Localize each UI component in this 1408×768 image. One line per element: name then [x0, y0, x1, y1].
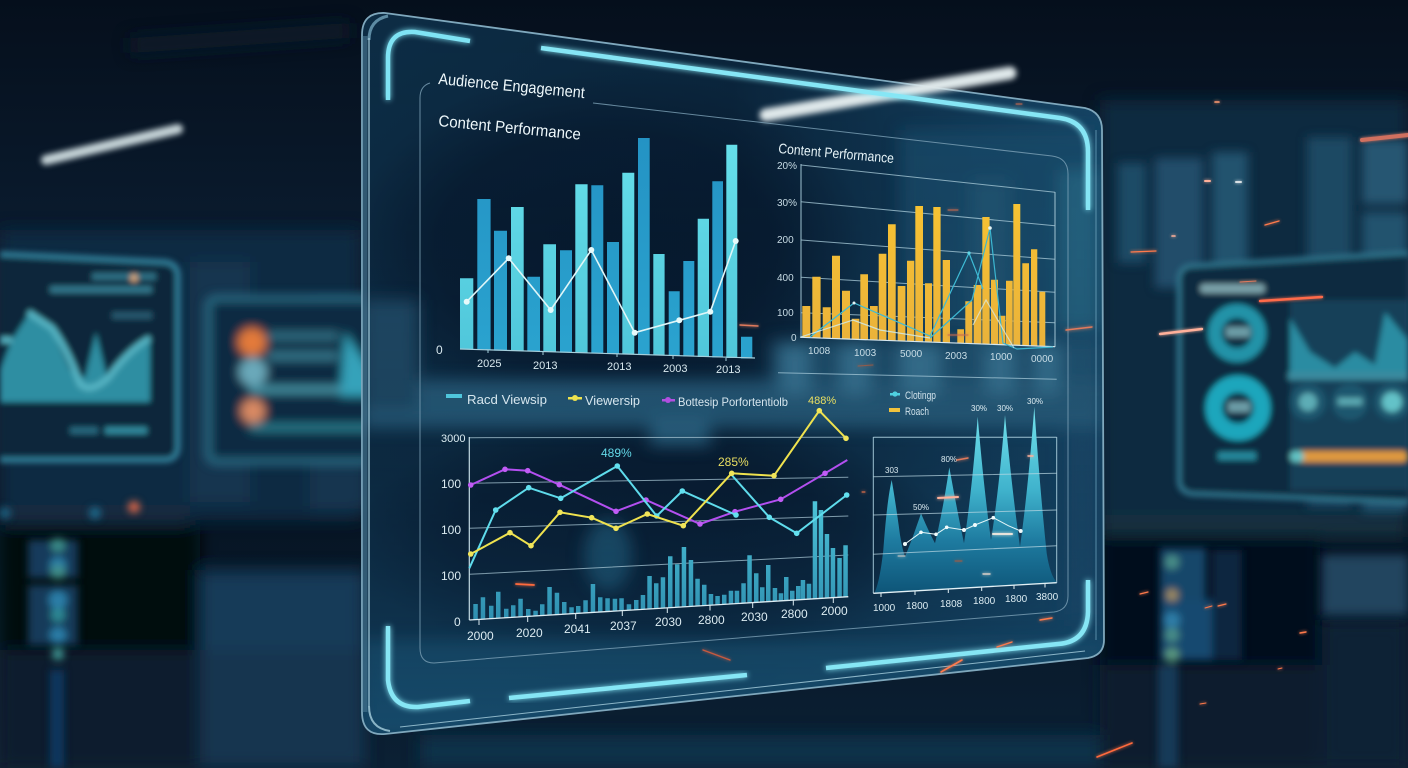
axis labels: 2041	[564, 622, 591, 636]
axis labels: 2030	[655, 615, 682, 629]
heading: Audience Engagement: Audience Engagement	[438, 71, 586, 102]
axis labels: 2037	[610, 619, 637, 633]
axis labels: 20%	[777, 161, 797, 172]
legend: main series: Bottesip Porfortentiolb	[678, 395, 788, 409]
neon frame bracket: bottom left	[388, 626, 470, 707]
neon frame bar: bottom middle	[509, 675, 747, 698]
heading: Content Performance right: Content Performance	[778, 140, 895, 166]
cyan line	[469, 463, 850, 568]
sparks	[516, 102, 1408, 757]
axis labels: 1000	[873, 603, 896, 614]
axis labels	[777, 161, 1054, 365]
glass background reflections	[362, 130, 1102, 735]
axis labels: 2020	[516, 626, 543, 640]
axis labels: 1808	[940, 599, 963, 610]
legend: main series: Racd Viewsip	[467, 392, 547, 407]
neon frame bracket: top left	[388, 32, 470, 100]
ceiling light left	[46, 129, 178, 160]
axis labels: 100	[777, 308, 794, 319]
axis labels: 3800	[1036, 592, 1059, 603]
axis labels: 2013	[533, 360, 557, 372]
data callouts: 285%	[718, 455, 749, 469]
yellow line	[468, 408, 849, 557]
legend: secondary series: Clotingp	[905, 390, 936, 402]
data callouts	[601, 395, 836, 469]
purple line	[468, 460, 847, 527]
server racks right	[1158, 548, 1242, 768]
dark zones behind charts	[393, 112, 902, 610]
area chart: reach	[873, 397, 1059, 614]
background windows right	[1118, 137, 1408, 615]
axis labels: 2800	[698, 613, 725, 627]
axis labels: 0	[436, 343, 443, 357]
axis labels: 2003	[663, 363, 687, 375]
axis labels: 2003	[945, 351, 968, 362]
peak labels: 30%	[1027, 397, 1043, 406]
axis labels: 0000	[1031, 354, 1054, 365]
legend: secondary series	[889, 390, 936, 418]
axis labels	[441, 433, 848, 643]
peak labels: 80%	[941, 455, 957, 464]
axis labels: 2013	[716, 364, 740, 376]
bar chart: content performance blue	[436, 138, 755, 376]
legend: main series	[446, 392, 788, 409]
peak labels: 303	[885, 466, 899, 475]
axis labels: 400	[777, 273, 794, 284]
axis labels: 1008	[808, 346, 831, 357]
reach trend lines	[800, 226, 1053, 349]
axis labels: 5000	[900, 349, 923, 360]
axis labels: 2025	[477, 358, 501, 370]
axis labels: 100	[441, 569, 461, 583]
axis labels: 200	[777, 235, 794, 246]
axis labels: 3000	[441, 433, 465, 445]
server racks left	[0, 501, 140, 768]
bar chart: content performance gold	[777, 161, 1055, 365]
neon frame bracket: bottom right	[826, 580, 1088, 668]
trend line	[903, 516, 1023, 546]
axis labels: 100	[441, 523, 461, 537]
heading: Content Performance left: Content Performance	[438, 113, 582, 144]
axis labels: 30%	[777, 198, 797, 209]
background screen: center-left chart monitor	[208, 298, 452, 462]
peak labels: 30%	[997, 404, 1013, 413]
axis labels: 2000	[467, 629, 494, 643]
ceiling light reflection	[766, 73, 1010, 115]
axis labels: 0	[454, 615, 461, 629]
peak labels	[885, 397, 1043, 512]
line and bar chart: viewership	[441, 395, 850, 643]
axis labels: 2800	[781, 607, 808, 621]
peak labels: 50%	[913, 503, 929, 512]
axis labels	[873, 592, 1059, 614]
axis labels: 1003	[854, 348, 877, 359]
background screen: left chart monitor	[0, 254, 178, 460]
legend: main series: Viewersip	[585, 393, 640, 408]
neon frame bracket: top right	[541, 48, 1088, 210]
background screen: right monitor with donut gauges	[1179, 253, 1408, 502]
axis labels	[436, 343, 740, 376]
data callouts: 488%	[808, 395, 836, 407]
axis labels: 1800	[973, 596, 996, 607]
axis labels: 100	[441, 477, 461, 491]
glass dashboard panel	[345, 10, 1105, 740]
axis labels: 2030	[741, 610, 768, 624]
axis labels: 2013	[607, 361, 631, 373]
peak labels: 30%	[971, 404, 987, 413]
inner panel outline	[420, 83, 1068, 663]
axis labels: 0	[791, 333, 797, 344]
small bars	[473, 501, 848, 620]
axis labels: 1800	[906, 601, 929, 612]
legend: secondary series: Roach	[905, 406, 929, 418]
trend line	[464, 238, 739, 336]
axis labels: 1800	[1005, 594, 1028, 605]
data callouts: 489%	[601, 446, 632, 460]
axis labels: 1000	[990, 352, 1013, 363]
axis labels: 2000	[821, 604, 848, 618]
